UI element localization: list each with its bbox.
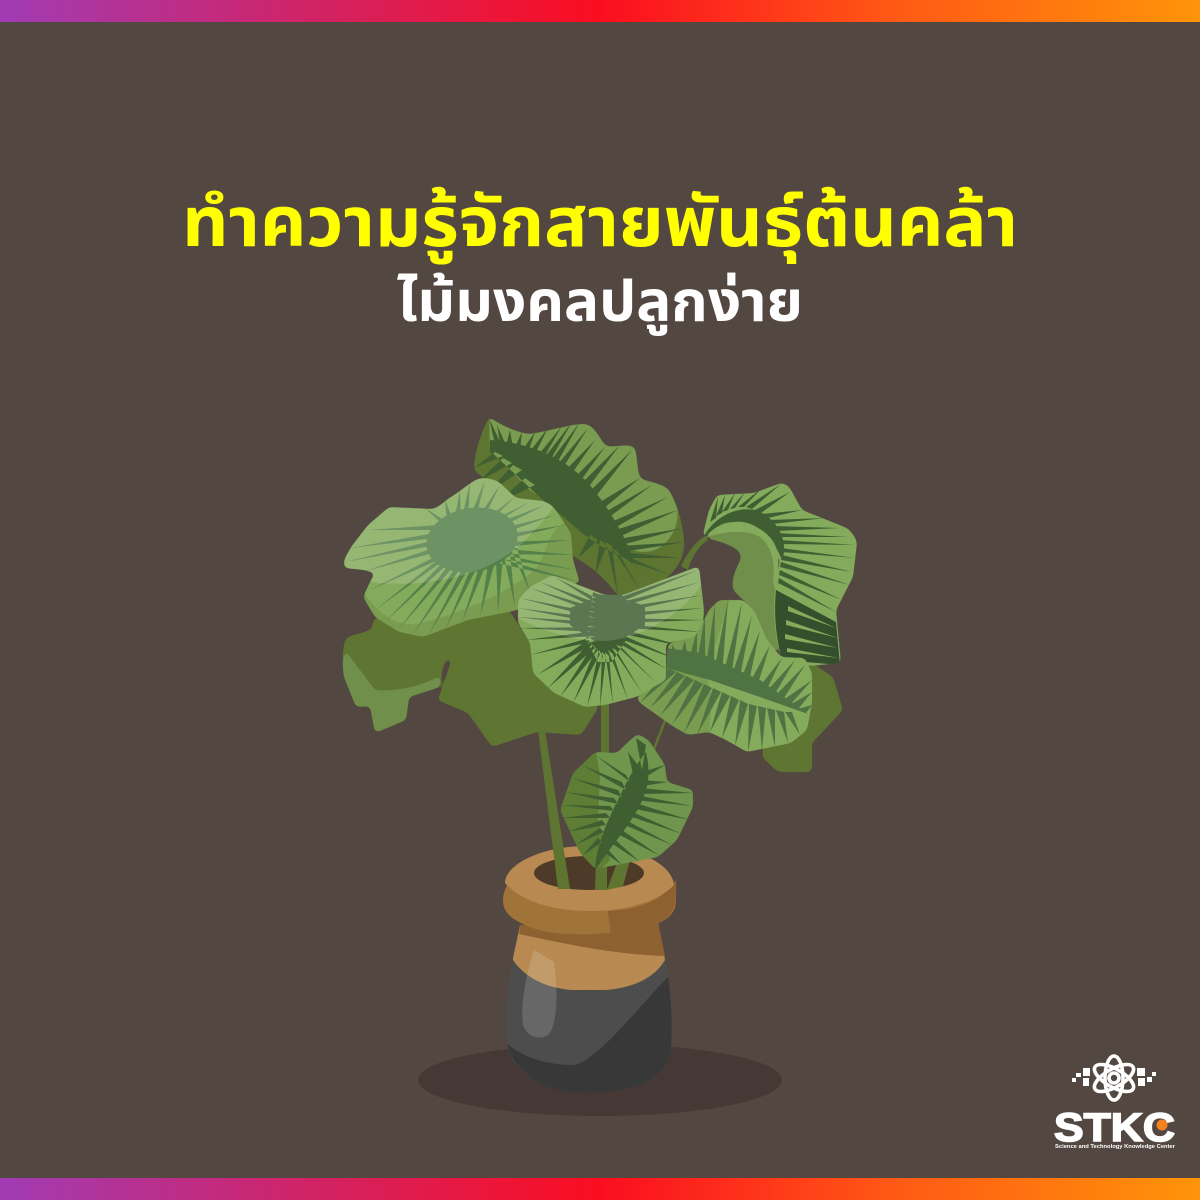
leaf blade — [704, 484, 857, 666]
logo: STKC — [1054, 1056, 1176, 1150]
leaf: back top — [474, 419, 684, 595]
leaf: right front — [638, 600, 812, 752]
subtitle: ไม้มงคลปลูกง่าย — [397, 261, 803, 347]
logo: tagline: Science and Technology Knowledge Center — [1055, 1144, 1176, 1150]
pot body — [506, 960, 672, 1093]
leaf: right back folded — [704, 484, 857, 666]
neck shadow — [519, 922, 665, 956]
pot neck — [513, 922, 665, 990]
inner fold — [705, 522, 781, 657]
bottom gradient bar — [0, 1178, 1200, 1200]
logo: atom icon — [1090, 1056, 1138, 1100]
logo: wordmark: STKC — [1054, 1106, 1175, 1150]
leaf: large front left — [344, 478, 579, 636]
leaf: centre fan — [518, 568, 704, 707]
title: ทำความรู้จักสายพันธุ์ต้นคล้า — [182, 174, 1018, 278]
body shadow — [507, 977, 672, 1093]
pot opening — [534, 856, 644, 890]
plant back stems — [601, 536, 708, 760]
leaf: olive back left — [343, 610, 599, 747]
top gradient bar — [0, 0, 1200, 22]
stems in the pot — [538, 730, 630, 890]
leaf: olive back right — [762, 663, 843, 772]
body highlight — [522, 950, 556, 1038]
rim side shadow — [608, 880, 676, 937]
pot — [503, 730, 676, 1093]
rim top — [505, 846, 674, 911]
inner fold highlight — [705, 522, 778, 590]
leaf: small front — [560, 735, 694, 868]
logo: pixel squares — [1072, 1068, 1156, 1086]
logo: orange dot — [1156, 1120, 1168, 1130]
rim side — [503, 846, 676, 934]
ground shadow — [418, 1044, 782, 1116]
